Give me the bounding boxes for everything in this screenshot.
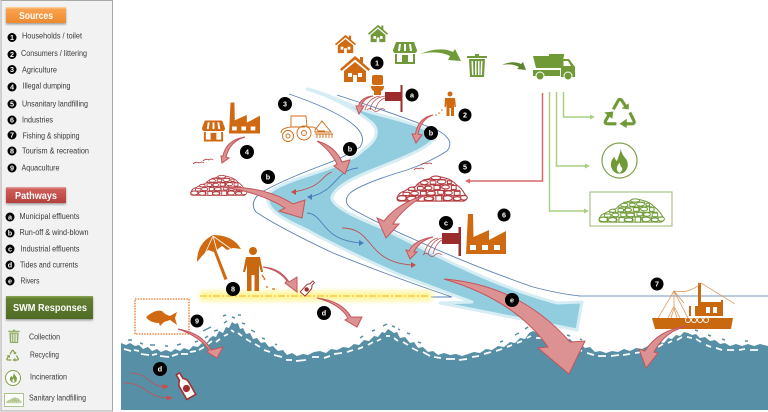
- list: pathways: [6, 212, 88, 286]
- icon: garbage truck: [533, 54, 575, 80]
- list: SWM responses: Sanitary landfilling: [29, 394, 86, 402]
- arrow: from landfill to river: [377, 195, 425, 238]
- numbered badges: [153, 56, 664, 376]
- numbered badges: e: [510, 296, 514, 304]
- splash: [124, 315, 758, 361]
- list: pathways: e: [8, 276, 12, 286]
- beach: shoreline: [200, 291, 432, 301]
- arrow: a: [356, 96, 373, 114]
- icon: fishing boat: [652, 283, 735, 329]
- arrow: b from person: [412, 115, 433, 143]
- icon: person littering: [435, 92, 456, 116]
- numbered badges: a: [410, 90, 415, 100]
- list: pathways: c: [8, 244, 12, 254]
- icon: sanitary landfill: [590, 192, 672, 226]
- icon: small bottle: [300, 280, 316, 296]
- numbered badges: 2: [463, 110, 467, 120]
- numbered badges: 7: [655, 280, 659, 288]
- numbered badges: c: [444, 218, 448, 228]
- icon: illegal dump: [191, 159, 247, 195]
- numbered badges: b: [266, 172, 271, 182]
- icon: store and factory: [202, 102, 260, 142]
- list: sources: Aquaculture: [22, 164, 60, 172]
- arrow: c: [406, 237, 433, 259]
- list: pathways: a: [8, 212, 13, 222]
- list: sources: Unsanitary landfilling: [22, 100, 88, 108]
- heading: Pathways: Pathways: [15, 191, 57, 202]
- icon: tractor: [281, 116, 333, 142]
- arrow: e river to ocean: [444, 279, 585, 374]
- heading: SWM Responses: [6, 296, 93, 319]
- panel: legend sidebar: [1, 0, 112, 411]
- list: SWM responses: [4, 330, 86, 406]
- arrow: aquaculture: [178, 329, 223, 358]
- numbered badges: 8: [231, 284, 235, 294]
- heading: SWM Responses: SWM Responses: [13, 303, 87, 314]
- list: sources: Industries: [22, 116, 53, 124]
- icon: municipal effluent pipe: [365, 85, 402, 112]
- list: pathways: d: [8, 260, 12, 270]
- arrow: b from agriculture: [317, 141, 350, 174]
- numbered badges: 3: [283, 100, 287, 108]
- list: sources: 1: [10, 33, 14, 42]
- list: sources: Agriculture: [22, 66, 57, 74]
- list: pathways: Municipal effluents: [20, 212, 80, 221]
- arrow: boat to ocean: [639, 326, 687, 368]
- list: SWM responses: Incineration: [30, 372, 67, 382]
- ocean: [121, 315, 768, 410]
- heading: Sources: Sources: [19, 11, 53, 22]
- list: sources: Consumers / littering: [21, 49, 87, 58]
- river banks: [253, 94, 768, 297]
- numbered badges: d: [322, 308, 326, 318]
- icon: recycling: [604, 99, 634, 128]
- heading: Pathways: [6, 187, 66, 203]
- list: pathways: Run-off & wind-blown: [20, 228, 88, 237]
- arrow: tourist littering: [263, 267, 297, 292]
- river currents: [291, 168, 416, 268]
- list: pathways: b: [8, 228, 13, 238]
- box: aquaculture: [135, 299, 189, 334]
- icon: incineration: [602, 143, 637, 178]
- numbered badges: b: [348, 144, 353, 154]
- ocean currents: [124, 373, 172, 400]
- list: sources: 7: [10, 130, 14, 140]
- list: sources: 2: [10, 50, 14, 59]
- list: sources: 5: [10, 100, 14, 108]
- icon: unsanitary landfill: [397, 163, 467, 201]
- list: sources: 4: [10, 82, 14, 92]
- list: pathways: Tides and currents: [20, 260, 78, 270]
- list: sources: Tourism & recreation: [22, 146, 89, 156]
- arrow: bin to truck: [502, 62, 526, 70]
- icon: umbrella: [197, 235, 241, 280]
- icon: waste bin: [467, 54, 487, 77]
- icon: fish: [146, 311, 177, 326]
- numbered badges: 1: [375, 58, 379, 68]
- icon: toilet: [371, 75, 384, 95]
- numbered badges: 9: [195, 316, 199, 326]
- numbered badges: b: [429, 128, 434, 138]
- list: pathways: Rivers: [20, 276, 40, 286]
- icon: ocean bottle: [173, 371, 196, 400]
- list: sources: 8: [10, 146, 14, 156]
- numbered badges: 4: [245, 148, 249, 156]
- icon: green store: [393, 42, 417, 64]
- heading: Sources: [6, 7, 66, 23]
- arrow: illegal dumping: [221, 137, 245, 163]
- list: pathways: Industrial effluents: [20, 244, 80, 254]
- icons: households: [335, 25, 388, 82]
- icon: industrial effluent pipe: [423, 227, 461, 256]
- icon: factory 6: [466, 214, 506, 254]
- numbered badges: 5: [463, 162, 467, 172]
- list: sources: Illegal dumping: [22, 82, 70, 90]
- list: sources: Households / toilet: [22, 32, 83, 40]
- list: SWM responses: Recycling: [30, 350, 59, 360]
- list: sources: [8, 32, 89, 172]
- list: sources: Fishing & shipping: [22, 132, 80, 140]
- arrow: d from beach: [317, 298, 362, 327]
- arrow: b from dump: [222, 187, 305, 218]
- numbered badges: 6: [502, 210, 506, 220]
- list: SWM responses: Collection: [29, 332, 60, 342]
- river: [253, 89, 768, 330]
- numbered badges: d: [158, 364, 162, 374]
- list: sources: 9: [10, 164, 14, 172]
- list: sources: 6: [10, 116, 14, 124]
- list: sources: 3: [10, 65, 14, 74]
- icon: tourist: [243, 247, 275, 291]
- arrow: store to bin: [420, 49, 461, 61]
- flow: landfill lines: [465, 92, 595, 214]
